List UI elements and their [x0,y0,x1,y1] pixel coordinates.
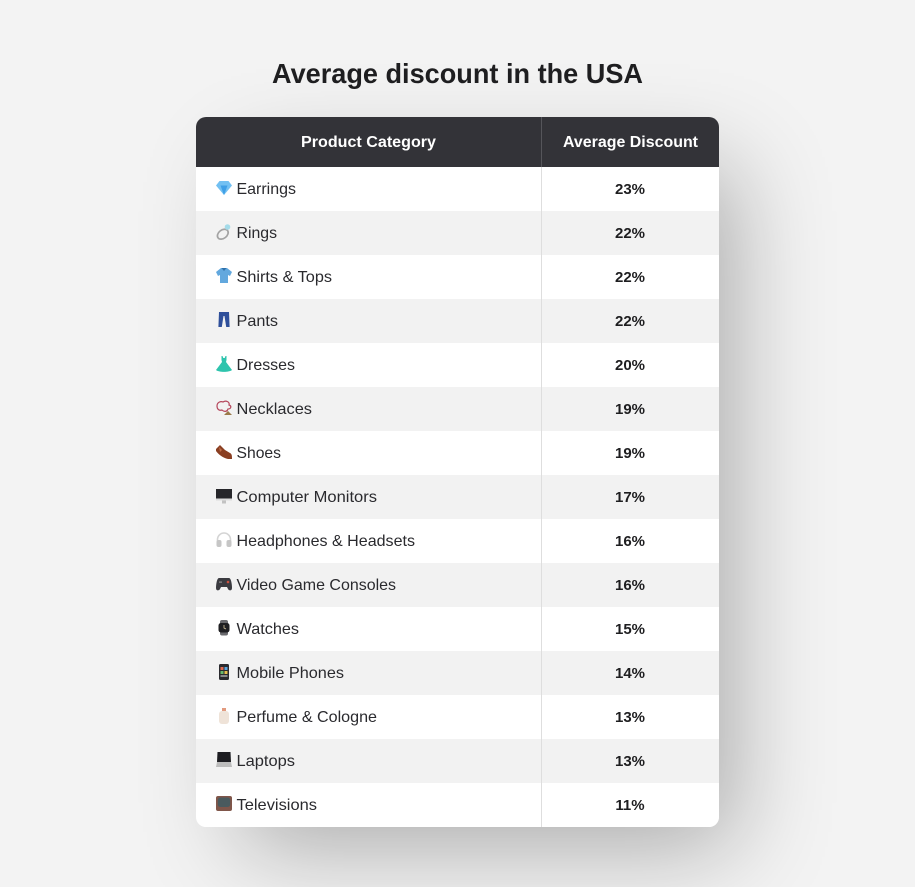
row: Computer Monitors: 17% [615,489,645,506]
row: Necklaces: Necklaces [236,401,312,418]
row: Dresses [216,356,645,374]
row: Televisions: 11% [615,797,645,814]
row: Shirts & Tops: 22% [615,269,645,286]
row: Watches [218,620,645,638]
table header [301,134,698,151]
row: Laptops [216,752,645,770]
row: Headphones & Headsets [216,533,645,550]
table [196,117,719,827]
row: Shoes: Shoes [236,445,281,462]
row: Dresses: 20% [615,357,645,374]
row: Mobile Phones [219,664,645,682]
row: Computer Monitors [216,489,645,506]
row: Laptops: 13% [615,753,645,770]
row: Earrings [216,181,645,198]
row: Video Game Consoles: Video Game Consoles [236,577,396,594]
row: Perfume & Cologne [219,708,645,726]
table header: Average Discount [563,134,698,151]
row: Perfume & Cologne: Perfume & Cologne [236,709,377,726]
row: Laptops: Laptops [236,753,295,770]
row: Earrings: 23% [615,181,645,198]
row: Dresses: Dresses [236,357,295,374]
row: Computer Monitors: Computer Monitors [236,489,377,506]
row: Video Game Consoles [216,577,645,594]
row: Necklaces: 19% [615,401,645,418]
row: Shirts & Tops [216,268,645,286]
row: Perfume & Cologne: 13% [615,709,645,726]
row: Rings: Rings [236,225,277,242]
row: Mobile Phones: Mobile Phones [236,665,344,682]
row: Pants [218,312,645,330]
row: Rings: 22% [615,225,645,242]
row: Shoes [216,445,645,462]
row: Mobile Phones: 14% [615,665,645,682]
row: Pants: Pants [236,313,278,330]
row: Televisions: Televisions [236,797,317,814]
row: Shirts & Tops: Shirts & Tops [236,269,332,286]
row: Pants: 22% [615,313,645,330]
row: Headphones & Headsets: Headphones & Headsets [236,533,415,550]
row: Shoes: 19% [615,445,645,462]
row: Rings [215,224,645,242]
row: Necklaces [217,401,645,418]
row: Watches: Watches [236,621,299,638]
table header: Product Category [301,134,436,151]
row: Earrings: Earrings [236,181,296,198]
row: Televisions [216,796,645,814]
row: Watches: 15% [615,621,645,638]
row: Headphones & Headsets: 16% [615,533,645,550]
row: Video Game Consoles: 16% [615,577,645,594]
title: Average discount in the USA [272,58,643,89]
